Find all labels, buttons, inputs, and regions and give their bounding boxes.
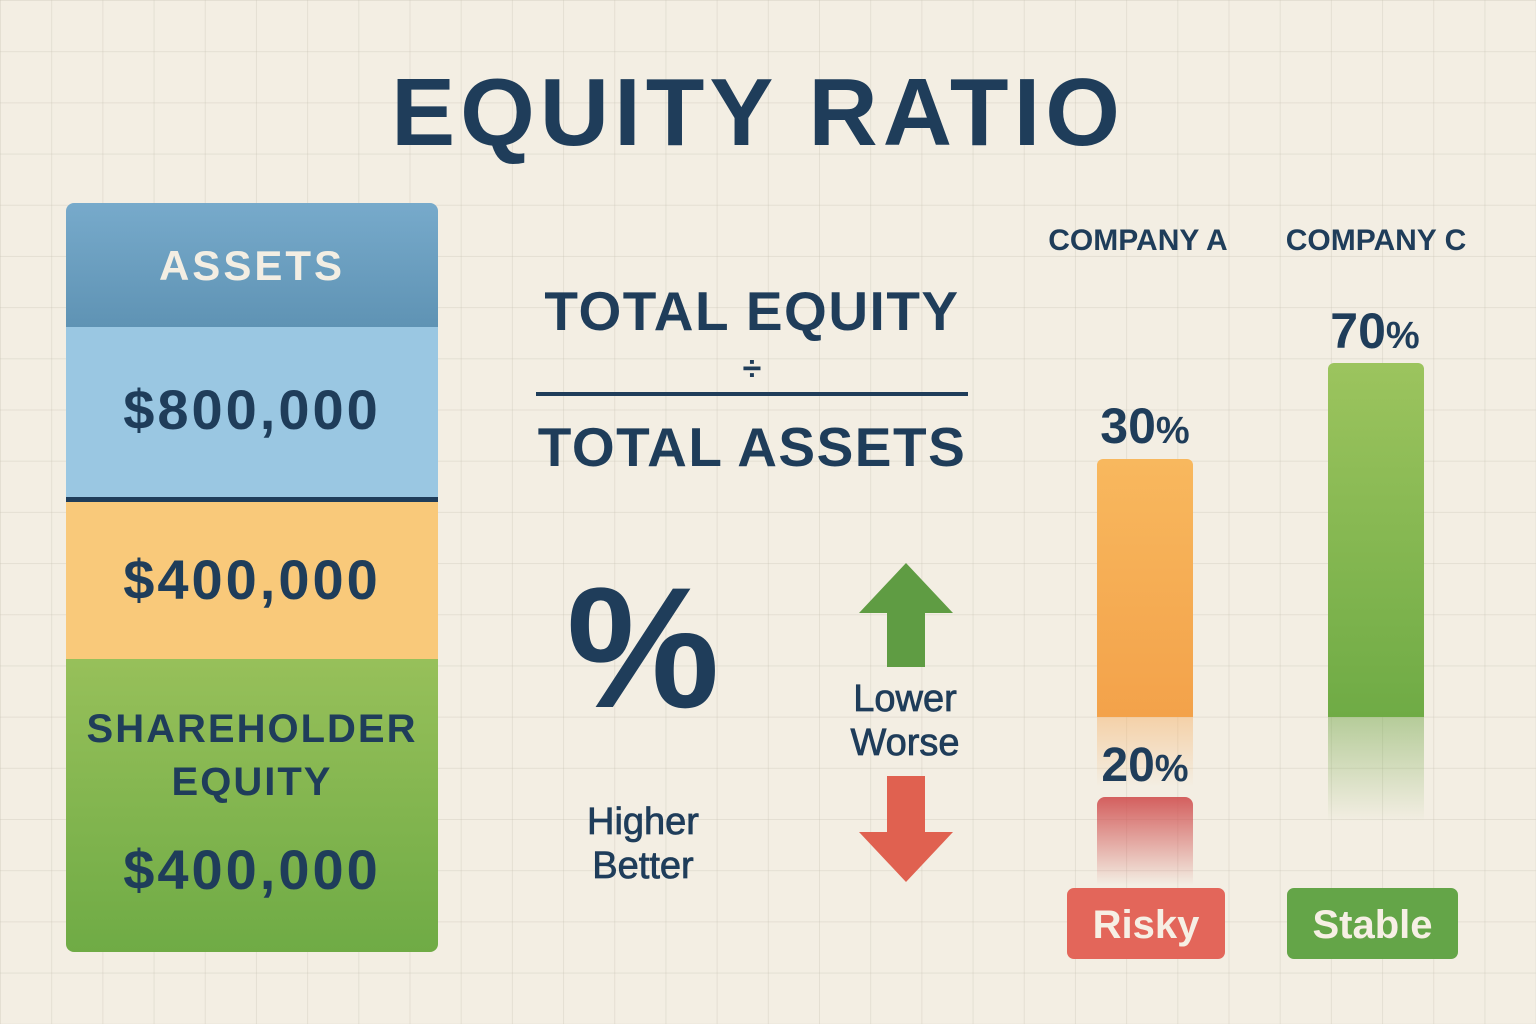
title: EQUITY RATIO (391, 59, 1125, 166)
formula (536, 280, 968, 478)
divide sign: ÷ (743, 350, 761, 388)
numerator: TOTAL EQUITY (544, 280, 960, 342)
shareholder equity (66, 659, 438, 952)
assets header (66, 203, 438, 327)
higher better text: Higher (587, 801, 699, 843)
lower worse text (850, 678, 960, 764)
higher better text (587, 801, 699, 887)
assets value: $800,000 (123, 378, 381, 441)
denominator: TOTAL ASSETS (538, 416, 966, 478)
shareholder equity: $400,000 (123, 838, 381, 901)
badge: stable: Stable (1312, 903, 1433, 947)
arrow down (859, 776, 953, 882)
arrow up (859, 563, 953, 667)
orange bar (1097, 459, 1193, 717)
badge: stable (1287, 888, 1458, 959)
30% label: 30% (1100, 398, 1190, 454)
lower worse text: Worse (850, 722, 960, 764)
70% label: 70% (1330, 303, 1420, 359)
higher better text: Better (592, 845, 694, 887)
percent icon: % (567, 552, 719, 744)
red bar (1097, 797, 1193, 885)
bar chart: company A (1097, 398, 1193, 880)
badge: risky (1067, 888, 1225, 959)
liabilities value: $400,000 (123, 548, 381, 611)
assets header: ASSETS (159, 242, 345, 289)
assets value (66, 327, 438, 499)
company A label: COMPANY A (1048, 224, 1228, 257)
panel: balance sheet (66, 203, 438, 952)
lower worse text: Lower (853, 678, 957, 720)
20% label: 20% (1101, 739, 1189, 792)
shareholder equity: EQUITY (172, 760, 332, 804)
shareholder equity: SHAREHOLDER (87, 707, 417, 751)
liabilities value (66, 502, 438, 659)
badge: risky: Risky (1093, 903, 1199, 947)
bar: company C (1328, 363, 1424, 717)
company C label: COMPANY C (1286, 224, 1466, 257)
